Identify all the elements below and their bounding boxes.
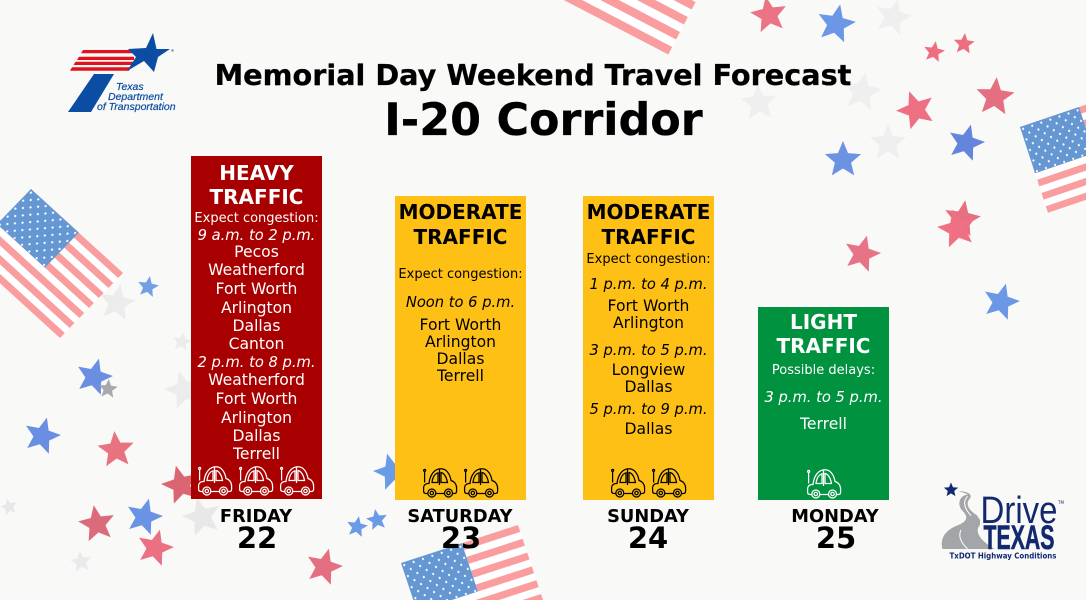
panel: Sunday moderate traffic: Fort Worth	[608, 297, 689, 315]
panel: Friday heavy traffic: Dallas	[233, 317, 280, 335]
panel: Sunday moderate traffic: Arlington	[613, 314, 684, 332]
panel: Friday heavy traffic: Canton	[229, 335, 284, 353]
panel: Saturday moderate traffic: Dallas	[437, 350, 484, 368]
panel: Monday light traffic: Possible delays:	[772, 363, 875, 378]
day label: Sunday 24: SUNDAY	[607, 506, 690, 527]
panel: Sunday moderate traffic: Longview	[612, 361, 686, 379]
panel: Friday heavy traffic: Fort Worth	[216, 280, 297, 298]
panel: Friday heavy traffic: Fort Worth	[216, 390, 297, 408]
panel: Sunday moderate traffic: 1 p.m. to 4 p.m.	[589, 276, 708, 293]
panel: Saturday moderate traffic: TRAFFIC	[414, 225, 507, 249]
panel: Monday light traffic: Terrell	[799, 415, 847, 433]
panel: Friday heavy traffic: Arlington	[221, 299, 292, 317]
logo: Drive Texas: TxDOT Highway Conditions	[950, 552, 1057, 560]
panel: Friday heavy traffic: Expect congestion:	[194, 211, 319, 226]
logo: Texas Department of Transportation: Texas	[116, 81, 144, 93]
panel: Sunday moderate traffic: 5 p.m. to 9 p.m.	[589, 401, 708, 418]
panel: Sunday moderate traffic: TRAFFIC	[602, 225, 695, 249]
panel: Saturday moderate traffic	[395, 196, 526, 500]
panel: Sunday moderate traffic: MODERATE	[587, 200, 710, 224]
logo: Texas Department of Transportation	[68, 33, 176, 113]
panel: Friday heavy traffic	[191, 156, 322, 499]
day label: Monday 25	[791, 506, 880, 555]
logo: Texas Department of Transportation: of Transportation	[97, 101, 176, 113]
flag: top centre	[551, 0, 719, 54]
panel: Friday heavy traffic: Weatherford	[208, 371, 305, 389]
panel: Saturday moderate traffic: Fort Worth	[420, 316, 501, 334]
panel: Friday heavy traffic: Weatherford	[208, 261, 305, 279]
logo: Drive Texas: Drive	[980, 490, 1058, 532]
logo: Texas Department of Transportation: Department	[108, 91, 164, 103]
panel: Saturday moderate traffic: Arlington	[425, 333, 496, 351]
panel: Monday light traffic: 3 p.m. to 5 p.m.	[764, 389, 883, 406]
panel: Friday heavy traffic: Dallas	[233, 427, 280, 445]
flag: left	[0, 189, 123, 338]
panel: Friday heavy traffic: Terrell	[232, 445, 280, 463]
panel: Saturday moderate traffic: Expect congestion:	[398, 267, 523, 282]
day label: Monday 25: 25	[816, 521, 856, 555]
day label: Monday 25: MONDAY	[791, 506, 880, 527]
panel: Friday heavy traffic: 9 a.m. to 2 p.m.	[198, 227, 315, 244]
title	[215, 58, 852, 146]
panel: Friday heavy traffic: 2 p.m. to 8 p.m.	[197, 354, 316, 371]
panel: Friday heavy traffic: TRAFFIC	[210, 185, 303, 209]
panel: Saturday moderate traffic: Noon to 6 p.m.	[406, 294, 515, 311]
logo: Drive Texas	[942, 482, 1064, 560]
day label: Friday 22: FRIDAY	[220, 506, 293, 527]
panel: Sunday moderate traffic: 3 p.m. to 5 p.m.	[589, 342, 708, 359]
day label: Sunday 24: 24	[628, 521, 668, 555]
day label: Friday 22: 22	[237, 521, 277, 555]
title: I-20 Corridor	[384, 95, 703, 146]
panel: Monday light traffic	[758, 307, 889, 500]
panel: Friday heavy traffic: Pecos	[234, 243, 279, 261]
logo: Drive Texas: TM	[1057, 500, 1064, 505]
flag: right	[1020, 88, 1086, 213]
panel: Saturday moderate traffic: MODERATE	[399, 200, 522, 224]
flag: bottom	[401, 525, 543, 600]
panel: Sunday moderate traffic: Dallas	[625, 420, 672, 438]
title: Memorial Day Weekend Travel Forecast	[215, 58, 852, 92]
day label: Friday 22	[220, 506, 293, 555]
day label: Saturday 23: 23	[441, 521, 481, 555]
panel: Sunday moderate traffic	[583, 196, 714, 500]
panel: Sunday moderate traffic: Expect congestion:	[586, 252, 711, 267]
panel: Monday light traffic: LIGHT	[790, 310, 857, 334]
day label: Sunday 24	[607, 506, 690, 555]
panel: Friday heavy traffic: HEAVY	[219, 161, 294, 185]
panel: Monday light traffic: TRAFFIC	[777, 334, 870, 358]
day label: Saturday 23	[407, 506, 514, 555]
panel: Saturday moderate traffic: Terrell	[436, 367, 484, 385]
day label: Saturday 23: SATURDAY	[407, 506, 514, 527]
panel: Sunday moderate traffic: Dallas	[625, 378, 672, 396]
panel: Friday heavy traffic: Arlington	[221, 409, 292, 427]
